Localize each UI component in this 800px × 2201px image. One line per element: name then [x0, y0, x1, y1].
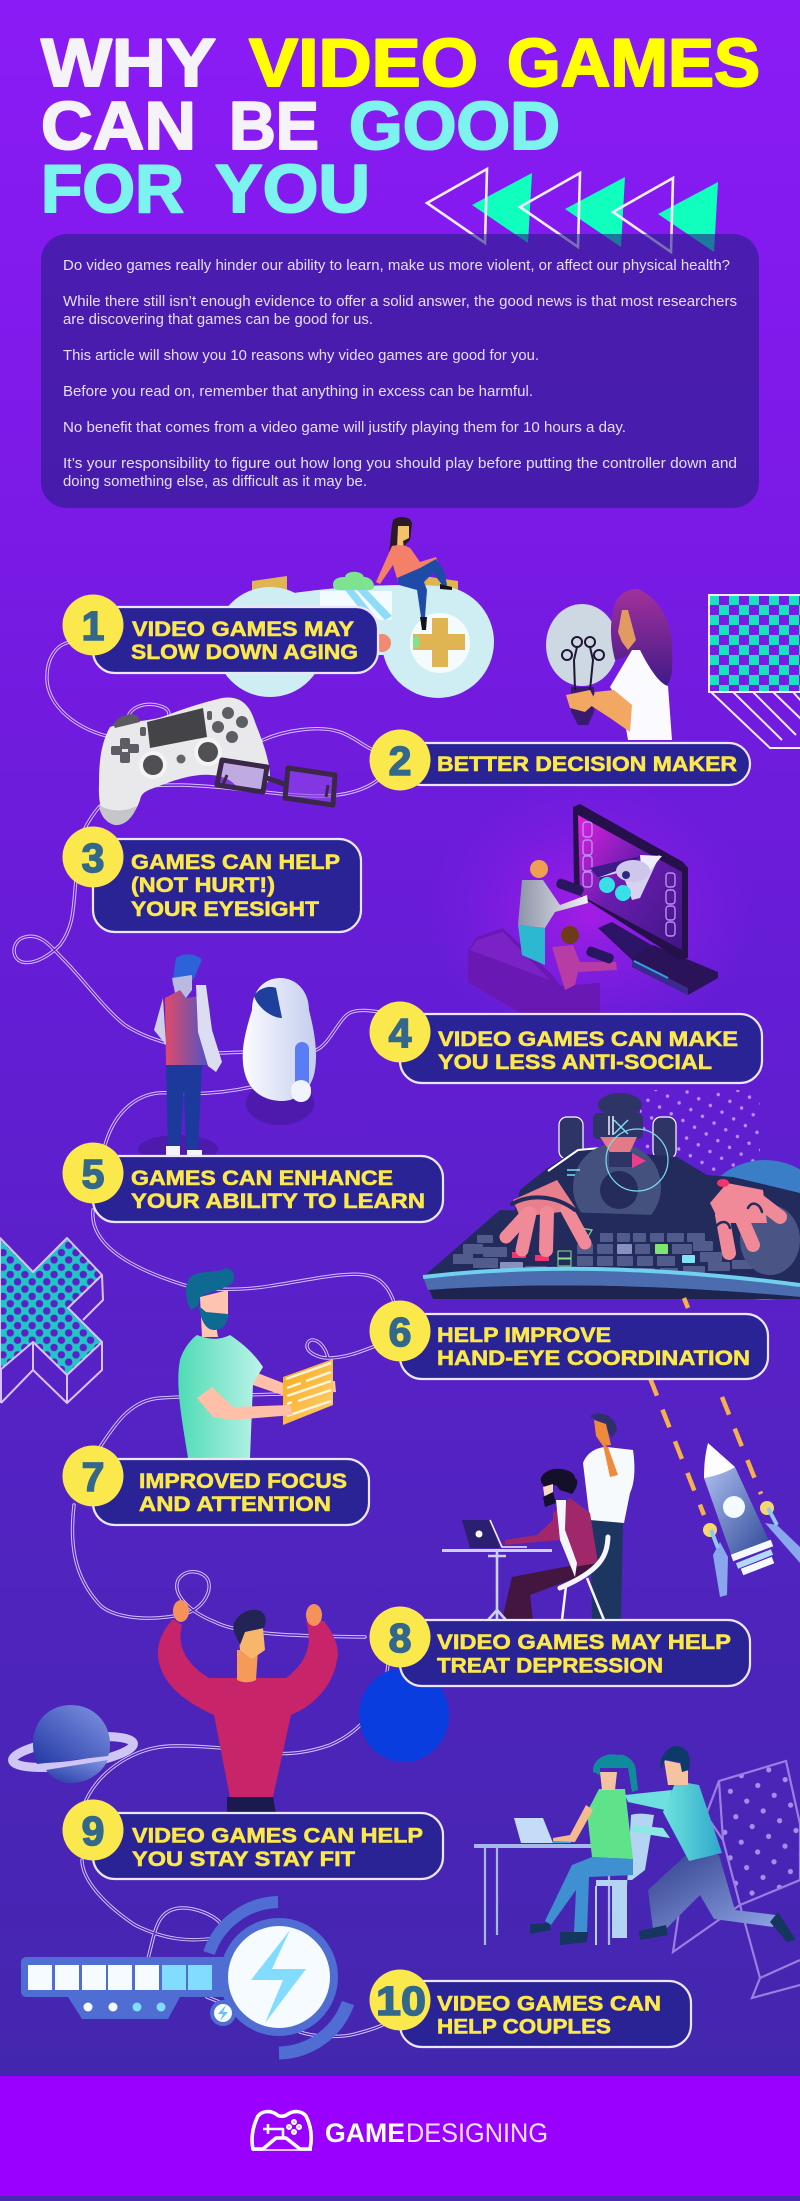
- item 10: [370, 1970, 691, 2047]
- item 10: HELP COUPLES: [437, 2014, 611, 2038]
- illustration: strong man and blue ball: [158, 1600, 449, 1813]
- panel: introduction: This article will show you 10 reasons why video games are good for you.: [63, 347, 539, 364]
- illustration: rocket with dashed trail: [650, 1298, 800, 1597]
- item 1: SLOW DOWN AGING: [131, 640, 358, 664]
- item 7: [62, 1446, 369, 1525]
- item 8: VIDEO GAMES MAY HELP: [437, 1630, 731, 1654]
- item 9: [62, 1800, 443, 1879]
- title: GAMES: [507, 25, 760, 101]
- illustration: ringed planet: [11, 1705, 135, 1783]
- woman sitting: [376, 517, 452, 630]
- illustration: man and robot: [138, 954, 316, 1163]
- panel: introduction: doing something else, as difficult as it may be.: [63, 473, 367, 490]
- item 3: YOUR EYESIGHT: [131, 897, 319, 921]
- title: [41, 25, 760, 227]
- item 3: [62, 826, 361, 932]
- item 1: [62, 594, 378, 673]
- item 1: VIDEO GAMES MAY: [132, 617, 354, 641]
- title: WHY: [41, 25, 216, 101]
- title: GOOD: [349, 88, 560, 164]
- illustration: big controller with woman: [215, 517, 494, 698]
- item 9: YOU STAY STAY FIT: [132, 1847, 355, 1871]
- item 5: YOUR ABILITY TO LEARN: [131, 1189, 425, 1213]
- item 6: 6: [389, 1309, 411, 1355]
- item 3: (NOT HURT!): [131, 873, 275, 897]
- item 6: HELP IMPROVE: [437, 1323, 611, 1347]
- panel: introduction: It’s your responsibility to figure out how long you should play before putting the controller down and: [63, 455, 737, 472]
- panel: introduction: are discovering that games can be good for us.: [63, 311, 373, 328]
- item 3: GAMES CAN HELP: [131, 850, 340, 874]
- glasses: [217, 760, 335, 805]
- item 10: 10: [376, 1978, 426, 2024]
- keys: [453, 1228, 753, 1275]
- item 2: BETTER DECISION MAKER: [437, 752, 737, 776]
- item 4: YOU LESS ANTI-SOCIAL: [438, 1050, 712, 1074]
- illustration: keyboard and gamer: [423, 1090, 800, 1300]
- item 2: [370, 730, 750, 790]
- item 6: HAND-EYE COORDINATION: [437, 1346, 750, 1370]
- item 5: 5: [82, 1151, 104, 1197]
- panel: introduction: Do video games really hinder our ability to learn, make us more violent, or affect our physical health?: [63, 257, 730, 274]
- item 8: TREAT DEPRESSION: [437, 1654, 663, 1678]
- panel: introduction: Before you read on, remember that anything in excess can be harmful.: [63, 383, 533, 400]
- illustration: couch gamers and TV: [425, 778, 755, 1048]
- item 4: VIDEO GAMES CAN MAKE: [438, 1027, 738, 1051]
- logo: GameDesigning: DESIGNING: [406, 2118, 548, 2148]
- illustration: sitting man and standing man: [442, 1414, 634, 1620]
- item 7: 7: [82, 1454, 104, 1500]
- item 3: 3: [82, 835, 104, 881]
- title: BE: [229, 88, 319, 164]
- woman: [545, 1857, 633, 1933]
- item 9: VIDEO GAMES CAN HELP: [132, 1824, 423, 1848]
- panel: introduction: While there still isn’t enough evidence to offer a solid answer, the good news is that most researchers: [63, 293, 737, 310]
- footer band: [0, 2076, 800, 2201]
- item 1: 1: [82, 603, 104, 649]
- item 8: [370, 1606, 750, 1686]
- pattern: X block: [0, 1238, 103, 1403]
- illustration: power gauge: [21, 1902, 348, 2053]
- illustration: couple at desk with cube: [474, 1746, 800, 1998]
- chair: [596, 1814, 654, 1938]
- item 4: [370, 1002, 762, 1083]
- panel: introduction: [41, 234, 759, 508]
- icon: gamepad: [252, 2112, 312, 2150]
- item 5: GAMES CAN ENHANCE: [131, 1166, 393, 1190]
- connector line: [14, 642, 396, 2036]
- item 7: IMPROVED FOCUS: [139, 1469, 347, 1493]
- logo: GameDesigning: [252, 2112, 548, 2150]
- illustration: white game controller and glasses: [99, 697, 335, 825]
- item 9: 9: [82, 1808, 104, 1854]
- title: CAN: [41, 88, 196, 164]
- sitting man: [552, 945, 617, 990]
- item 7: AND ATTENTION: [139, 1492, 331, 1516]
- hands: [506, 1179, 800, 1275]
- title: FOR: [41, 151, 184, 227]
- man: [648, 1855, 776, 1929]
- logo: GameDesigning: GAME: [325, 2118, 405, 2148]
- item 10: VIDEO GAMES CAN: [437, 1992, 661, 2016]
- pattern: checker block: [709, 595, 800, 748]
- item 8: 8: [389, 1615, 411, 1661]
- title: VIDEO: [249, 25, 478, 101]
- item 6: [370, 1300, 768, 1379]
- item 5: [62, 1142, 443, 1222]
- item 2: 2: [389, 738, 411, 784]
- arrows: triangles: [427, 169, 718, 252]
- sofa: [468, 928, 600, 1014]
- illustration: woman holding light bulb: [546, 589, 672, 740]
- title: YOU: [215, 151, 370, 227]
- standing man: [518, 925, 545, 965]
- item 4: 4: [389, 1010, 412, 1056]
- panel: introduction: No benefit that comes from a video game will justify playing them for 10 hours a day.: [63, 419, 626, 436]
- illustration: man with tablet: [178, 1268, 336, 1458]
